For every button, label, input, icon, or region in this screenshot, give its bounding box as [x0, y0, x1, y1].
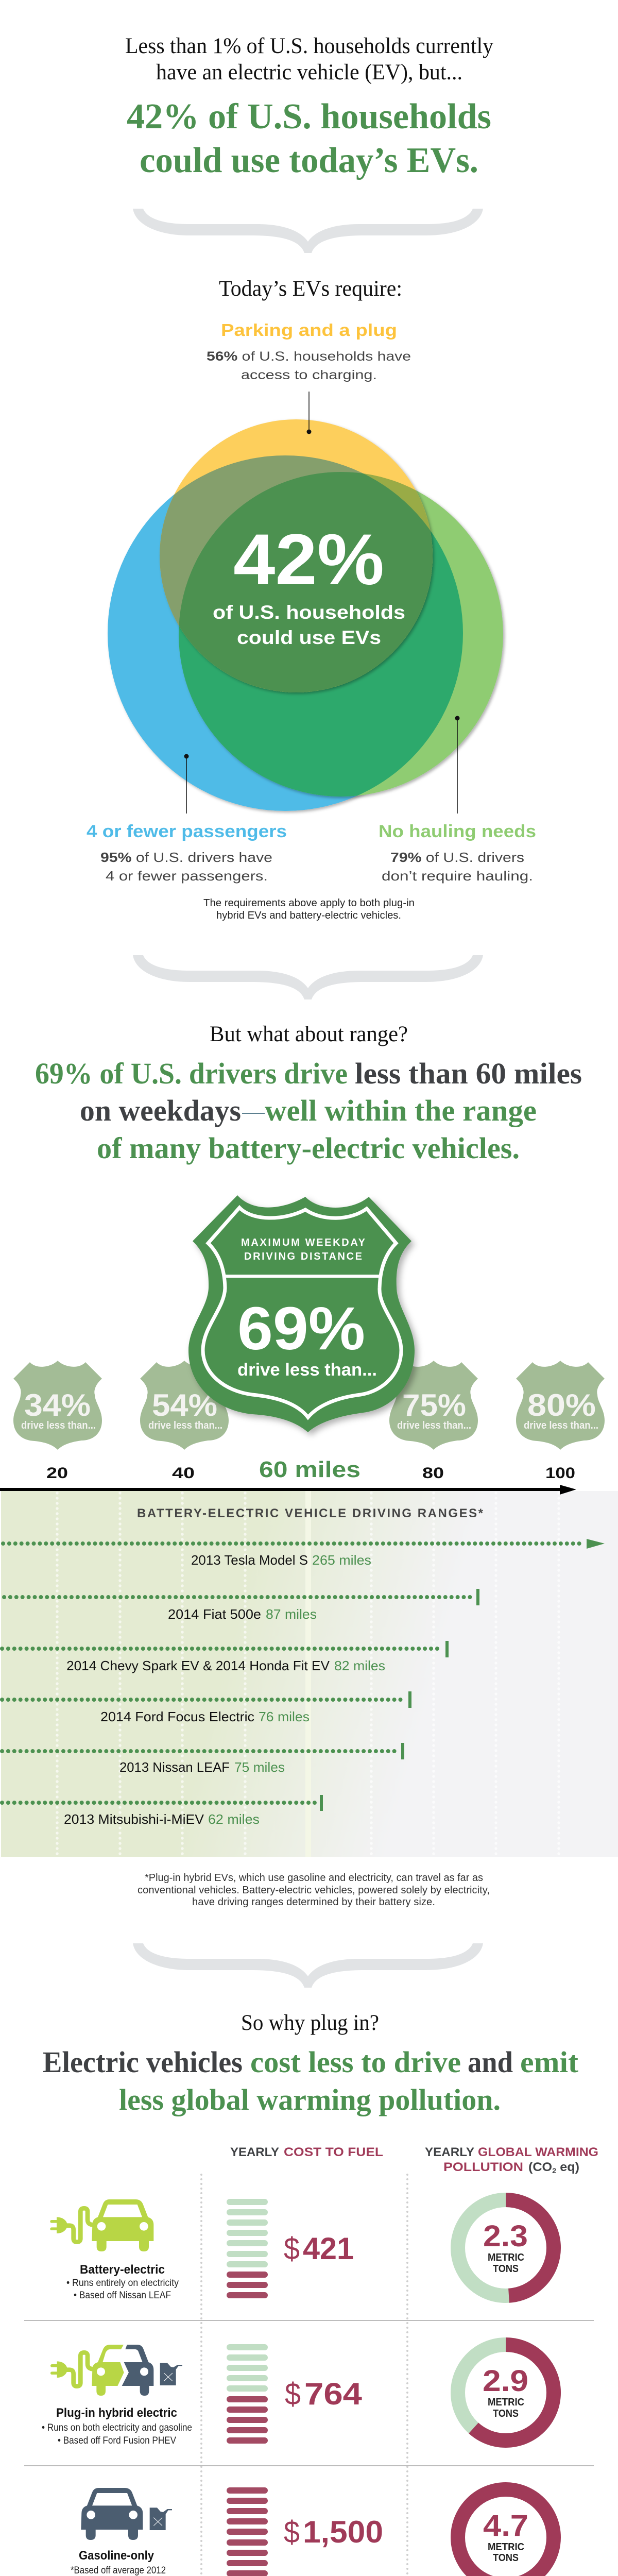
- headline: cost less and emit less: [43, 2045, 579, 2116]
- footnote: plug-in hybrids: have driving ranges determined by their battery size.: [192, 1896, 435, 1908]
- bars: $421: [227, 2199, 268, 2298]
- small shield: 54% at 40 miles: drive less than...: [148, 1420, 222, 1431]
- small shield: 34% at 20 miles: 34%: [24, 1388, 91, 1422]
- note: requirements: [203, 897, 415, 921]
- label: parking and a plug: access to charging.: [241, 368, 377, 382]
- range: Nissan LEAF: 75 miles: [234, 1759, 285, 1775]
- large shield: 69% at 60 miles: DRIVING DISTANCE: [244, 1251, 362, 1262]
- title: could use today’s EVs.: [140, 141, 478, 180]
- range: Chevy Spark and Honda Fit: [2, 1641, 449, 1673]
- small shield: 80% at 100 miles: [516, 1361, 605, 1450]
- donut: 2.3 metric tons: 2.3: [483, 2219, 528, 2253]
- large shield: 69% at 60 miles: MAXIMUM WEEKDAY: [241, 1237, 366, 1248]
- column header: cost to fuel: COST TO FUEL: [284, 2145, 383, 2159]
- donut: 2.9 metric tons: 2.9: [483, 2364, 528, 2398]
- range: Fiat 500e: [4, 1589, 479, 1622]
- small shield: 75% at 80 miles: drive less than...: [397, 1420, 471, 1431]
- large shield: 69% at 60 miles: drive less than...: [237, 1360, 377, 1380]
- label: 4 or fewer passengers: 4 or fewer passengers: [87, 822, 287, 841]
- axis labels: 40: [172, 1465, 195, 1482]
- donut: 4.7 metric tons: TONS: [493, 2552, 519, 2564]
- intro text: [125, 34, 493, 84]
- label: no hauling needs: 79% of U.S. drivers: [390, 850, 524, 865]
- label: plug-in hybrid electric: • Based off Ford Fusion PHEV: [58, 2435, 176, 2446]
- venn diagram: 42%: [233, 519, 384, 600]
- note: requirements: The requirements above apply to both plug-in: [203, 897, 415, 909]
- label: no hauling needs: don’t require hauling.: [382, 868, 533, 884]
- cost: $1,500: 1,500: [303, 2515, 383, 2549]
- icon: gasoline car: [81, 2488, 172, 2540]
- range: Mitsubishi i-MiEV: 62 miles: [208, 1811, 260, 1827]
- axis labels: [46, 1457, 575, 1482]
- range: Ford Focus Electric: 76 miles: [259, 1709, 310, 1724]
- donut: 4.7 metric tons: METRIC: [488, 2541, 524, 2553]
- icon: plug-in hybrid car: [50, 2345, 182, 2396]
- venn diagram: could use EVs: [237, 627, 381, 648]
- footnote: plug-in hybrids: [138, 1872, 490, 1908]
- footnote: plug-in hybrids: conventional vehicles. Battery-electric vehicles, powered solely by electricity,: [138, 1885, 490, 1896]
- donut: 2.3 metric tons: [458, 2200, 554, 2296]
- label: battery-electric: • Based off Nissan LEAF: [74, 2290, 171, 2301]
- table dividers: [24, 2175, 594, 2576]
- footnote: plug-in hybrids: *Plug-in hybrid EVs, which use gasoline and electricity, can travel as far as: [145, 1872, 483, 1884]
- range: Fiat 500e: 87 miles: [266, 1606, 317, 1622]
- small shield: 34% at 20 miles: [13, 1361, 102, 1450]
- leader: hauling: [455, 716, 459, 814]
- label: no hauling needs: No hauling needs: [379, 822, 536, 841]
- label: 4 or fewer passengers: [87, 822, 287, 884]
- range: Mitsubishi i-MiEV: 2013 Mitsubishi-i-MiEV: [64, 1811, 204, 1827]
- range: Ford Focus Electric: [2, 1691, 411, 1724]
- label: battery-electric: • Runs entirely on electricity: [66, 2278, 179, 2289]
- range: Ford Focus Electric: 2014 Ford Focus Electric: [100, 1709, 254, 1724]
- cost: $764: $: [285, 2377, 301, 2411]
- column header: cost to fuel: YEARLY: [230, 2145, 279, 2159]
- label: parking and a plug: 56% of U.S. households have: [207, 349, 411, 364]
- label: gasoline-only: *Based off average 2012: [71, 2565, 166, 2576]
- donut: 4.7 metric tons: 4.7: [483, 2509, 528, 2543]
- venn diagram: [108, 419, 503, 811]
- headline: 69% of drivers: 69% of U.S. drivers drive: [35, 1057, 348, 1090]
- donut: 2.9 metric tons: TONS: [493, 2408, 519, 2419]
- cost: $764: [285, 2377, 363, 2411]
- axis arrow: [0, 1485, 576, 1495]
- range: Mitsubishi i-MiEV: [2, 1795, 323, 1827]
- donut: 4.7 metric tons: [458, 2489, 554, 2576]
- column header: global warming pollution: GLOBAL WARMING: [478, 2145, 598, 2159]
- cost: $1,500: $: [284, 2515, 300, 2549]
- small shield: 34% at 20 miles: drive less than...: [21, 1420, 96, 1431]
- brace divider 3: [133, 1943, 483, 1988]
- headline: cost less and emit less: less global warming pollution.: [119, 2083, 501, 2116]
- chart title: BATTERY-ELECTRIC VEHICLE DRIVING RANGES*: [137, 1506, 484, 1520]
- leader: passengers: [184, 754, 188, 814]
- label: battery-electric: Battery-electric: [80, 2263, 165, 2277]
- range: Tesla Model S: 2013 Tesla Model S: [191, 1552, 308, 1568]
- small shield: 80% at 100 miles: drive less than...: [524, 1420, 598, 1431]
- label: battery-electric: [66, 2263, 179, 2301]
- cost: $421: 421: [303, 2231, 354, 2266]
- brace divider 2: [133, 955, 483, 999]
- label: no hauling needs: [379, 822, 536, 884]
- headline: 69% of drivers: of many battery-electric vehicles.: [97, 1131, 520, 1165]
- column header: global warming pollution: POLLUTION: [443, 2160, 523, 2174]
- range: Tesla Model S: 265 miles: [312, 1552, 371, 1568]
- cost: $764: 764: [304, 2377, 363, 2411]
- range: Nissan LEAF: [2, 1743, 404, 1775]
- axis labels: 20: [46, 1465, 68, 1482]
- column header: global warming pollution: YEARLY: [425, 2145, 474, 2159]
- small shield: 54% at 40 miles: 54%: [152, 1388, 217, 1422]
- intro text: Less than 1% of U.S. households currently: [125, 34, 493, 58]
- range: Chevy Spark and Honda Fit: 2014 Chevy Spark EV & 2014 Honda Fit EV: [66, 1658, 330, 1673]
- axis labels: 80: [422, 1465, 444, 1482]
- headline: cost less and emit less: cost less to drive: [250, 2045, 461, 2079]
- large shield: 69% at 60 miles: [188, 1195, 415, 1432]
- column header: global warming pollution: eq): [556, 2160, 579, 2174]
- headline: cost less and emit less: Electric vehicles: [43, 2045, 243, 2079]
- donut: 2.9 metric tons: METRIC: [488, 2397, 524, 2408]
- column header: global warming pollution: [425, 2145, 598, 2175]
- axis labels: 60 miles: [259, 1457, 360, 1482]
- bars: $764: [227, 2344, 268, 2444]
- title: 42% of U.S. households: [127, 97, 491, 137]
- donut: 2.3 metric tons: TONS: [493, 2263, 519, 2275]
- label: 4 or fewer passengers: 95% of U.S. drivers have: [100, 850, 272, 865]
- label: 4 or fewer passengers: 4 or fewer passengers.: [106, 868, 268, 884]
- headline: cost less and emit less: and: [468, 2045, 513, 2079]
- range: Fiat 500e: 2014 Fiat 500e: [168, 1606, 261, 1622]
- label: plug-in hybrid electric: Plug-in hybrid electric: [56, 2406, 177, 2420]
- small shield: 75% at 80 miles: 75%: [402, 1388, 466, 1422]
- headline: 69% of drivers: on weekdays: [80, 1094, 241, 1127]
- headline: 69% of drivers: less than 60 miles: [355, 1057, 582, 1090]
- donut: 2.9 metric tons: [458, 2345, 554, 2441]
- title: [127, 97, 491, 180]
- heading: so why plug in: So why plug in?: [241, 2011, 379, 2035]
- column header: global warming pollution: 2: [552, 2166, 556, 2175]
- intro text: have an electric vehicle (EV), but...: [156, 60, 462, 84]
- icon: battery-electric car: [50, 2199, 153, 2251]
- donut: 2.3 metric tons: METRIC: [488, 2252, 524, 2263]
- label: gasoline-only: Gasoline-only: [79, 2549, 154, 2563]
- range: Tesla Model S: [3, 1539, 605, 1568]
- range chart background band: [1, 1491, 618, 1857]
- headline: cost less and emit less: emit: [520, 2045, 579, 2079]
- label: gasoline-only: [63, 2549, 170, 2576]
- headline: 69% of drivers: [35, 1057, 582, 1165]
- heading: today's EVs require: Today’s EVs require:: [219, 277, 402, 301]
- brace divider 1: [133, 209, 483, 253]
- small shield: 80% at 100 miles: 80%: [527, 1388, 596, 1422]
- range: Chevy Spark and Honda Fit: 82 miles: [334, 1658, 385, 1673]
- small shield: 54% at 40 miles: [140, 1361, 229, 1450]
- leader: parking: [307, 392, 311, 434]
- headline: 69% of drivers: well within the range: [265, 1094, 537, 1127]
- cost: $421: $: [284, 2231, 300, 2266]
- label: parking and a plug: Parking and a plug: [221, 320, 397, 340]
- large shield: 69% at 60 miles: 69%: [237, 1295, 365, 1363]
- venn diagram: of U.S. households: [213, 602, 405, 623]
- label: plug-in hybrid electric: [42, 2406, 192, 2446]
- axis labels: 100: [545, 1465, 575, 1482]
- label: plug-in hybrid electric: • Runs on both electricity and gasoline: [42, 2422, 192, 2433]
- note: requirements: hybrid EVs and battery-electric vehicles.: [216, 910, 401, 921]
- column header: global warming pollution: (CO: [528, 2160, 551, 2174]
- range: Nissan LEAF: 2013 Nissan LEAF: [119, 1759, 230, 1775]
- small shield: 75% at 80 miles: [389, 1361, 478, 1450]
- column header: cost to fuel: [230, 2145, 383, 2159]
- label: parking and a plug: [207, 320, 411, 382]
- bars: $1,500: [227, 2487, 268, 2576]
- heading: but what about range: But what about range?: [210, 1022, 408, 1046]
